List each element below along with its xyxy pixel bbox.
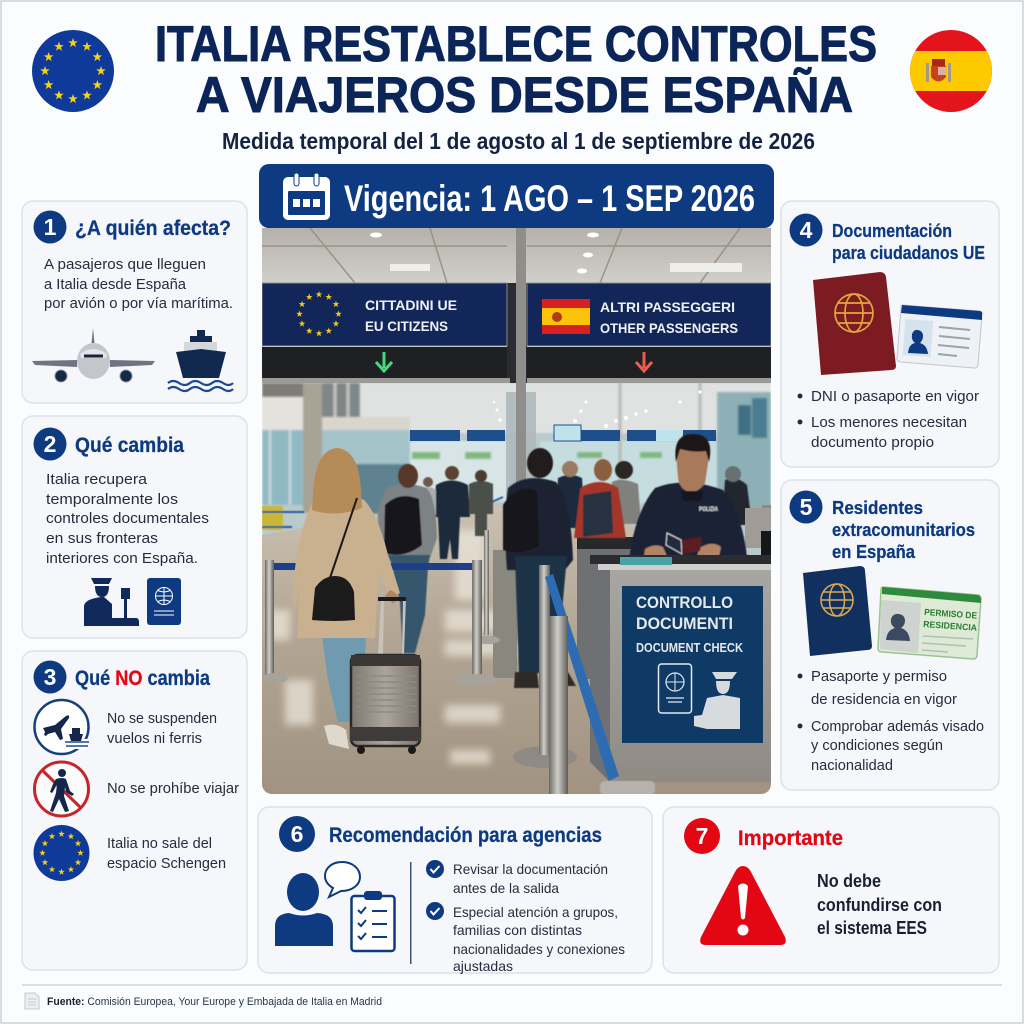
photo: rear passenger with backpack (378, 464, 437, 653)
badge 3 (34, 660, 66, 694)
photo: document check desk (590, 555, 771, 782)
heading 5: Residentes (832, 498, 923, 518)
icon: travel not prohibited (34, 762, 88, 816)
badge 2: 2 (44, 431, 56, 457)
bullets 5: nacionalidad (811, 757, 893, 774)
photo: central pillar and gate (493, 228, 536, 678)
icon: residence permit (878, 587, 981, 659)
text 7: el sistema EES (817, 918, 927, 938)
badge 4 (790, 214, 822, 246)
heading 4 (832, 221, 985, 263)
icon: blue passport (803, 566, 872, 656)
icon: officer at desk (84, 578, 139, 626)
photo: red jacket traveller (574, 459, 626, 538)
text 2: temporalmente los (46, 491, 178, 508)
bullets 4: DNI o pasaporte en vigor (811, 388, 979, 405)
badge 1: 1 (44, 214, 57, 240)
text 3 (107, 710, 239, 872)
sign text (366, 300, 456, 331)
icon: residence permit: PERMISO DE (924, 607, 977, 621)
source text: Fuente: Comisión Europea, Your Europe y Embajada de Italia en Madrid (47, 996, 382, 1008)
icon: ID card (897, 305, 982, 368)
heading 5: en España (832, 542, 916, 562)
desk sign (622, 586, 763, 743)
heading 4: Documentación (832, 221, 952, 241)
text 6: antes de la salida (453, 880, 559, 896)
icon: residence permit: RESIDENCIA (923, 619, 978, 633)
bullets 5 (798, 668, 984, 774)
photo: suitcase (350, 597, 421, 754)
subtitle: Medida temporal del 1 de agosto al 1 de septiembre de 2026 (222, 128, 815, 154)
badge 7 (684, 818, 720, 854)
sign text: OTHER PASSENGERS (600, 320, 738, 336)
icon: check 2 (426, 902, 444, 920)
icon: passport on desk sign (658, 664, 692, 713)
text 3: espacio Schengen (107, 855, 226, 872)
sign text: EU CITIZENS (365, 318, 448, 334)
divider (410, 862, 412, 964)
heading 2: Qué cambia (75, 434, 184, 457)
text 1: a Italia desde España (44, 276, 187, 293)
photo: airport border control (262, 228, 771, 795)
bullets 5: de residencia en vigor (811, 691, 957, 708)
text 3: No se prohíbe viajar (107, 780, 239, 797)
title: A VIAJEROS DESDE ESPAÑA (196, 67, 853, 123)
heading 6: Recomendación para agencias (329, 824, 602, 847)
heading 3: Qué NO cambia (75, 667, 210, 690)
photo: ceiling (262, 228, 771, 284)
photo: overhead blue signs (410, 425, 716, 441)
badge 7: 7 (696, 823, 708, 849)
text 1: A pasajeros que lleguen (44, 256, 206, 273)
icon: warning triangle (700, 866, 786, 945)
icon: red passport (813, 272, 896, 375)
photo: yellow barrier and rear belts (262, 497, 503, 530)
photo: ceiling lights (493, 390, 702, 428)
text 7 (817, 871, 942, 938)
icon: calendar (283, 173, 330, 220)
panel 5: Residentes extracomunitarios (781, 480, 999, 790)
heading 4: para ciudadanos UE (832, 243, 985, 263)
text 1: por avión o por vía marítima. (44, 295, 233, 312)
badge 6: 6 (291, 821, 303, 847)
bullets 4: documento propio (811, 434, 934, 451)
text 2: controles documentales (46, 510, 209, 527)
icon: officer on desk sign (694, 672, 740, 729)
sign text (600, 302, 738, 333)
text 2: interiores con España. (46, 550, 198, 567)
bullets 5: y condiciones según (811, 737, 943, 754)
photo: left overhead sign (262, 283, 510, 383)
icon: ship (168, 330, 233, 391)
heading 5 (832, 498, 975, 562)
icon: green arrow (376, 352, 392, 371)
text 3: Italia no sale del (107, 835, 212, 852)
bullets 4: Los menores necesitan (811, 414, 967, 431)
text 7: No debe (817, 871, 881, 891)
text 6: ajustadas (453, 958, 513, 974)
title (155, 16, 877, 123)
photo: man in navy jacket (503, 448, 576, 688)
icon: Spanish flag (910, 30, 992, 112)
icon: Schengen EU flag (34, 825, 90, 881)
panel 1: ¿A quién afecta? (22, 201, 247, 403)
photo: background crowd (420, 461, 752, 559)
text 3: vuelos ni ferris (107, 730, 202, 747)
photo: terminal hall background (262, 380, 771, 560)
heading 5: extracomunitarios (832, 520, 975, 540)
text 6: Especial atención a grupos, (453, 904, 618, 920)
bullets 5: Comprobar además visado (811, 718, 984, 735)
text 2: Italia recupera (46, 471, 148, 488)
badge 2 (34, 428, 66, 460)
text 1 (44, 256, 233, 312)
icon: passport (147, 578, 181, 625)
panel 4: Documentación para ciudadanos UE (781, 201, 999, 467)
photo: floor (262, 503, 771, 794)
panel 2: Qué cambia (22, 416, 247, 638)
badge 3: 3 (44, 664, 56, 690)
text 7: confundirse con (817, 895, 942, 915)
text 2 (46, 471, 209, 567)
photo: right overhead sign (527, 283, 771, 383)
badge 6 (279, 816, 315, 852)
text 6: Revisar la documentación (453, 861, 608, 877)
header (32, 16, 992, 154)
panel 7: Importante (663, 807, 999, 973)
icon: red arrow (636, 352, 652, 371)
panel 3: Qué NO cambia (22, 651, 247, 970)
icon: document (25, 993, 39, 1009)
icon: check 1 (426, 860, 444, 878)
text 6 (453, 861, 625, 974)
icon: EU flag (32, 30, 114, 112)
photo: stanchions and rope (262, 530, 577, 768)
badge 5 (790, 490, 822, 524)
desk sign: DOCUMENTI (636, 614, 733, 633)
photo: front stanchion (545, 574, 655, 795)
desk sign: DOCUMENT CHECK (636, 641, 743, 655)
photo: rear desk (577, 505, 771, 679)
photo: woman with trench coat (292, 448, 400, 749)
badge 4: 4 (800, 217, 813, 243)
desk sign: CONTROLLO (636, 593, 733, 612)
bullets 5: Pasaporte y permiso (811, 668, 947, 685)
badge 5: 5 (800, 494, 813, 520)
icon: airplane (32, 328, 155, 382)
text 6: familias con distintas (453, 922, 582, 938)
photo: police officer: POLIZIA (699, 506, 718, 513)
badge 1 (34, 210, 66, 244)
text 6: nacionalidades y conexiones (453, 941, 625, 957)
footer (22, 984, 1002, 1009)
bullets 4 (798, 388, 979, 451)
icon: Spanish flag on sign (542, 299, 590, 334)
sign text: CITTADINI UE (365, 297, 457, 313)
icon: EU stars on sign (296, 291, 342, 336)
text 2: en sus fronteras (46, 530, 158, 547)
icon: advisor with clipboard (275, 862, 394, 951)
panel 6: Recomendación para agencias (258, 807, 652, 974)
sign text: ALTRI PASSEGGERI (600, 299, 735, 315)
title: ITALIA RESTABLECE CONTROLES (155, 16, 877, 72)
banner text: Vigencia: 1 AGO – 1 SEP 2026 (344, 178, 755, 219)
heading 1: ¿A quién afecta? (75, 217, 231, 240)
heading 7: Importante (738, 827, 843, 850)
photo: police officer (629, 434, 747, 560)
date banner (259, 164, 774, 228)
text 3: No se suspenden (107, 710, 217, 727)
icon: flights and ferries (34, 700, 89, 754)
